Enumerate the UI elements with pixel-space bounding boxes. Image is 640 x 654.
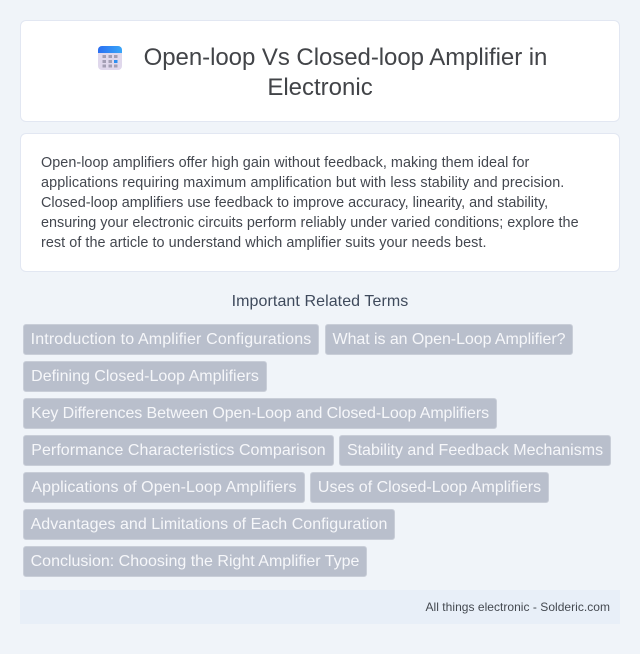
tag: Applications of Open-Loop Amplifiers [31,479,297,496]
tag [23,324,319,355]
tag [23,472,305,503]
tag: What is an Open-Loop Amplifier? [333,331,565,348]
tag: Stability and Feedback Mechanisms [347,442,603,459]
tag [23,361,267,392]
tag: Advantages and Limitations of Each Configuration [31,516,387,533]
summary text [41,155,579,251]
title: Electronic [267,74,373,101]
tag: Performance Characteristics Comparison [31,442,326,459]
panel: summary card [20,133,620,272]
tag [23,546,367,577]
tag [310,472,549,503]
tag [23,435,334,466]
summary text: Open-loop amplifiers offer high gain without feedback, making them ideal for [41,155,529,171]
tag [23,509,395,540]
footer bar [20,590,620,624]
tag [325,324,573,355]
panel: title card [20,20,620,122]
footer text: All things electronic - Solderic.com [426,600,610,614]
tag: Uses of Closed-Loop Amplifiers [318,479,541,496]
icon: calendar [98,46,122,70]
title [144,44,547,101]
tag: Key Differences Between Open-Loop and Closed-Loop Amplifiers [31,405,489,422]
summary text: ensuring your electronic circuits perform reliably under varied conditions; explore the [41,215,579,231]
summary text: rest of the article to understand which amplifier suits your needs best. [41,235,486,251]
tag: Conclusion: Choosing the Right Amplifier Type [31,553,359,570]
title: Open-loop Vs Closed-loop Amplifier in [144,44,547,71]
summary text: Closed-loop amplifiers use feedback to improve accuracy, linearity, and stability, [41,195,548,211]
tag: Introduction to Amplifier Configurations [31,331,311,348]
tag: Defining Closed-Loop Amplifiers [31,368,259,385]
summary text: applications requiring maximum amplification but with less stability and precision. [41,175,564,191]
tag list [23,324,611,577]
tag [23,398,497,429]
tag [339,435,611,466]
heading: important related terms: Important Related Terms [232,293,408,310]
